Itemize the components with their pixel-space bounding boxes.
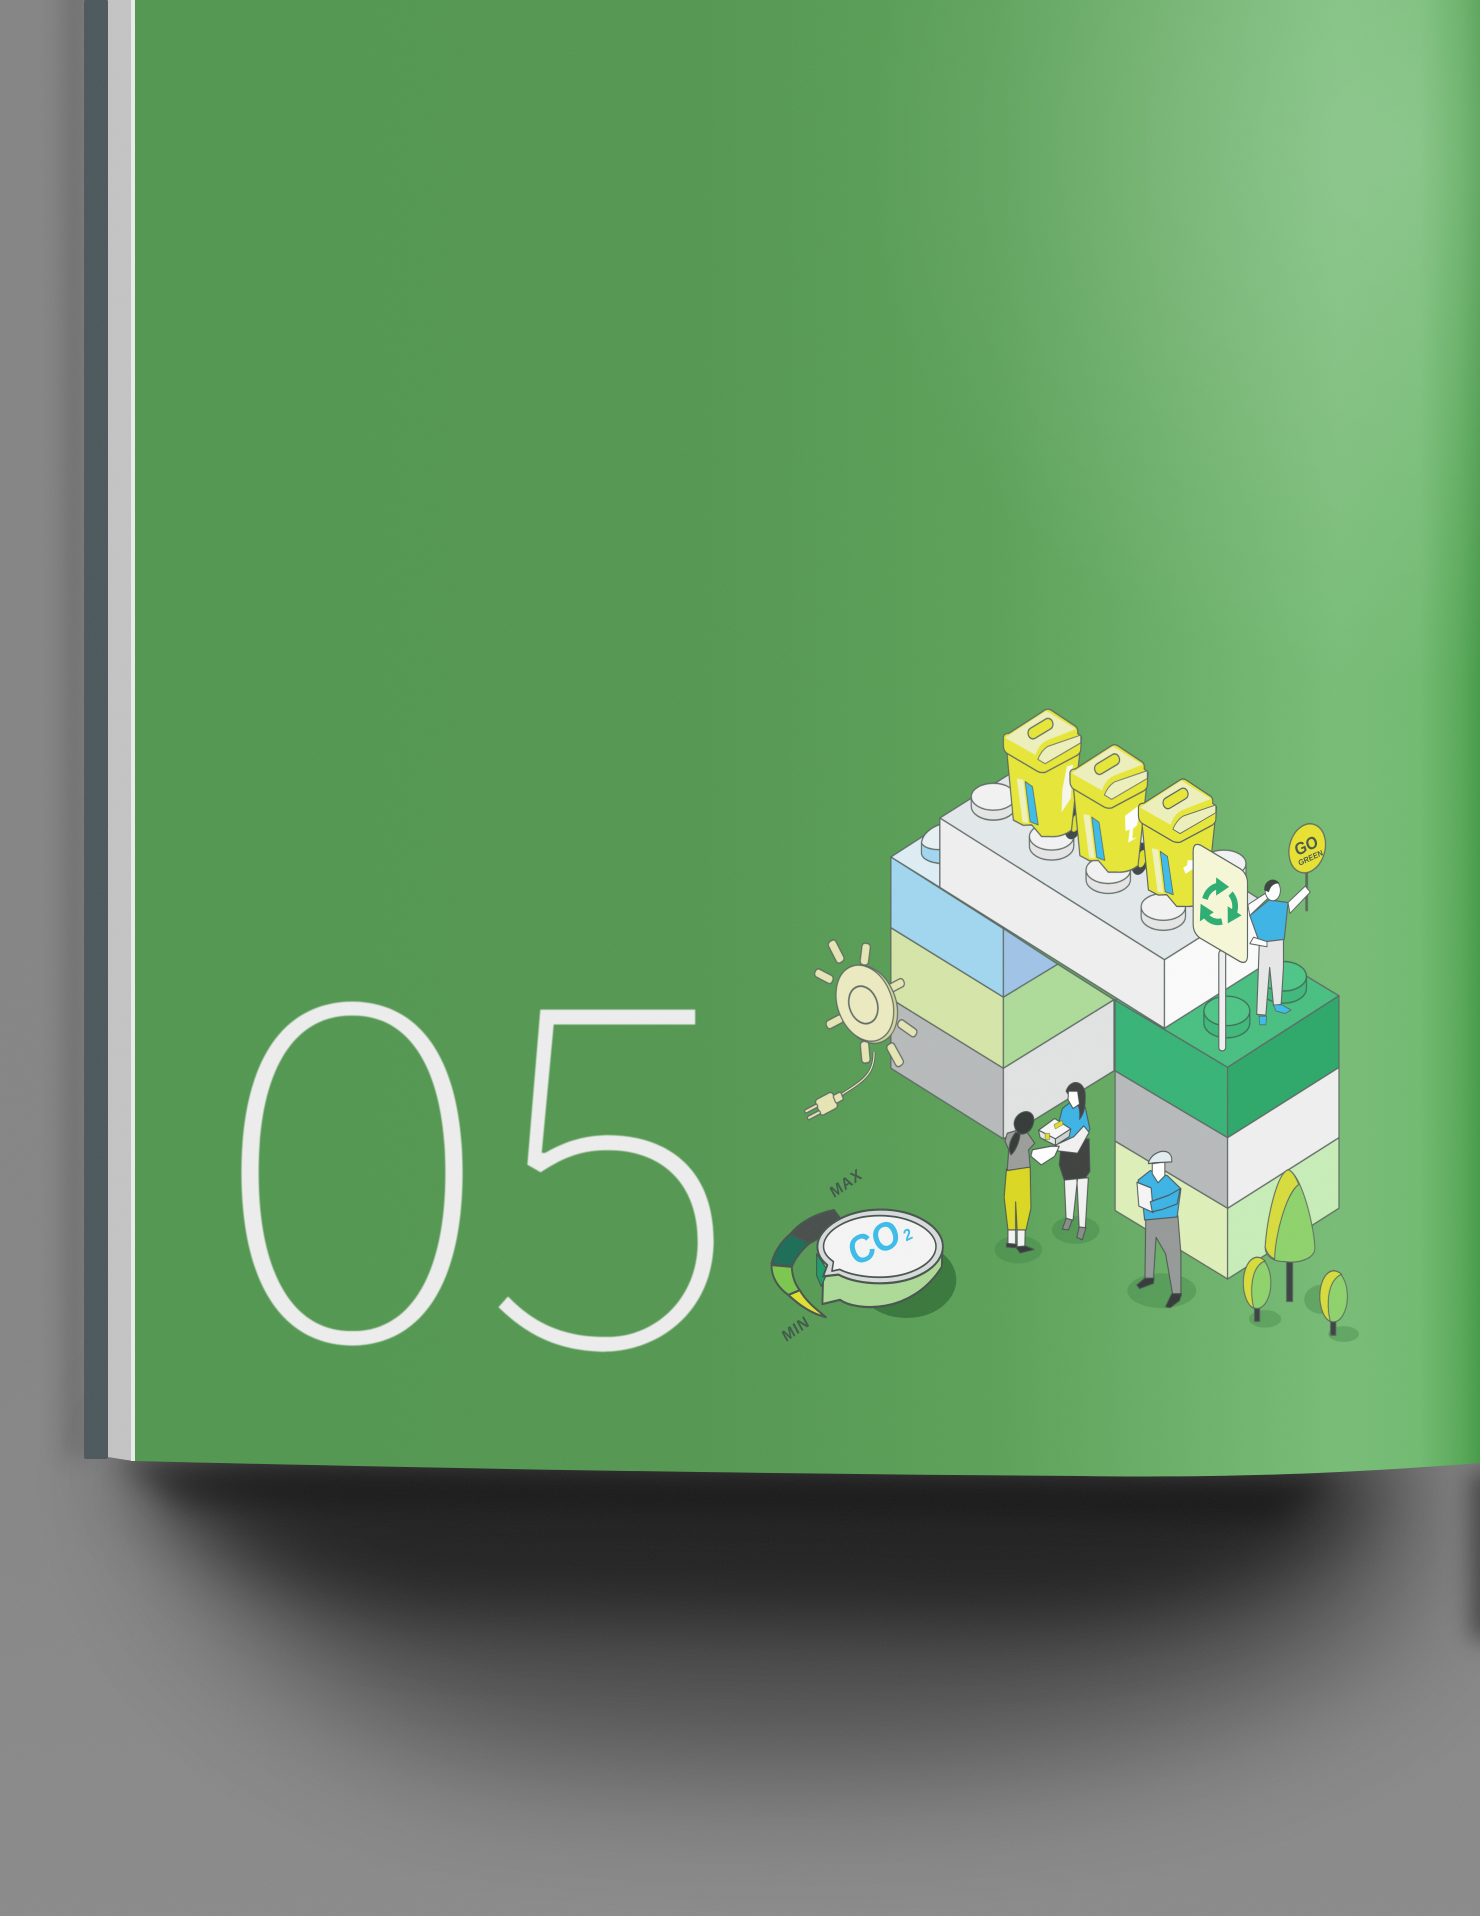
sign panel: [1193, 844, 1247, 962]
magazine back cover edge: [84, 0, 108, 1459]
bin 3: [1138, 779, 1221, 911]
hair: [1066, 1083, 1085, 1119]
arm: [1055, 1126, 1089, 1153]
gauge yellow segment: [788, 1290, 826, 1317]
small tree right: [1320, 1271, 1347, 1335]
co2 gauge: [771, 1210, 840, 1317]
co2 speech bubble: [817, 1210, 943, 1307]
trunk: [1287, 1260, 1293, 1302]
trousers: [1004, 1167, 1031, 1230]
plug: [803, 1088, 845, 1122]
right tower of blocks: [1115, 929, 1339, 1279]
sign pole: [1219, 950, 1226, 1051]
helmet: [1148, 1151, 1172, 1164]
bin 2 label: [1125, 804, 1142, 843]
bin 1 label: [1062, 765, 1073, 812]
crown: [1265, 1170, 1315, 1262]
green block: [1115, 929, 1339, 1138]
parcel box: [1039, 1118, 1071, 1145]
co2 subscript: 2: [901, 1225, 915, 1246]
ground shadows: [995, 1216, 1359, 1342]
disc: [827, 954, 909, 1055]
gauge deep green segment: [771, 1234, 809, 1267]
page light sheen: [135, 0, 1480, 1476]
go green text: [1291, 832, 1325, 868]
blue block: [891, 824, 1058, 997]
left tower of blocks: [891, 824, 1114, 1139]
ponytail: [1009, 1132, 1020, 1155]
shirt: [1058, 1102, 1090, 1142]
green page: [135, 0, 1480, 1476]
bubble side: [822, 1246, 943, 1307]
page block edge: [108, 0, 133, 1461]
recycling sign: [1193, 844, 1247, 1051]
arm: [1031, 1146, 1059, 1165]
trousers: [1145, 1216, 1181, 1294]
trousers: [1257, 938, 1283, 1015]
small tree left: [1243, 1257, 1271, 1321]
go green text: GO: [1292, 832, 1321, 860]
digit 5: 5: [482, 791, 742, 1484]
digit 0: 0: [210, 791, 494, 1476]
hair: [1264, 880, 1280, 892]
tablet: [1137, 1182, 1153, 1213]
long white block: [940, 758, 1260, 1028]
go green stick: [1305, 868, 1308, 911]
green block studs: [1204, 961, 1306, 1038]
person holding go green sign: [1248, 818, 1332, 1025]
co2 text: CO: [842, 1210, 906, 1275]
big tree: [1265, 1170, 1315, 1302]
shirt: [1250, 900, 1288, 942]
woman with black skirt: [1055, 1083, 1090, 1240]
bubble face: [824, 1216, 936, 1277]
grey block: [891, 999, 1114, 1139]
light block: [1115, 1138, 1339, 1279]
head: [1265, 880, 1280, 901]
arms: [1248, 886, 1310, 947]
bin 3 label: [1183, 860, 1200, 874]
white block studs: [971, 783, 1246, 930]
grey block right tower: [1115, 1067, 1339, 1208]
bubble rim: [817, 1210, 943, 1283]
arm: [1150, 1189, 1180, 1212]
heels: [1062, 1218, 1086, 1240]
bin 1: [1003, 709, 1086, 842]
shirt: [1138, 1171, 1181, 1220]
recycling bins: [1003, 709, 1221, 911]
rays: [814, 939, 918, 1068]
bin 2: [1070, 745, 1152, 877]
face: [1152, 1162, 1165, 1183]
shade beside magazine spine: [66, 0, 84, 1460]
head: [1014, 1112, 1034, 1134]
socks: [1008, 1230, 1025, 1247]
legs: [1064, 1178, 1088, 1228]
page drop shadow: [112, 1440, 1480, 1766]
min label: MIN: [780, 1313, 813, 1346]
shoes: [1137, 1278, 1182, 1308]
cord: [840, 1052, 874, 1096]
co2 bubble shadow: [857, 1242, 956, 1318]
shoes: [1006, 1243, 1034, 1253]
page block highlight: [131, 0, 135, 1461]
gauge mid green segment: [771, 1265, 800, 1295]
plug and sun device: [803, 939, 918, 1122]
shoes: [1259, 1005, 1291, 1025]
face: [1068, 1091, 1080, 1109]
go green text: GREEN: [1297, 848, 1325, 868]
recycle arrows: [1193, 877, 1247, 932]
isometric illustration: [771, 709, 1359, 1346]
woman with yellow trousers: [1004, 1112, 1059, 1253]
go green paddle: [1283, 818, 1332, 879]
top: [1005, 1128, 1035, 1171]
gauge dark segment: [791, 1210, 840, 1243]
max label: MAX: [827, 1166, 865, 1202]
man with helmet and tablet: [1137, 1151, 1182, 1308]
crown highlight: [1265, 1170, 1299, 1259]
bubble accent: [817, 1254, 828, 1286]
chapter number 05: [210, 791, 742, 1484]
light green block: [891, 928, 1114, 1068]
skirt: [1059, 1139, 1090, 1180]
